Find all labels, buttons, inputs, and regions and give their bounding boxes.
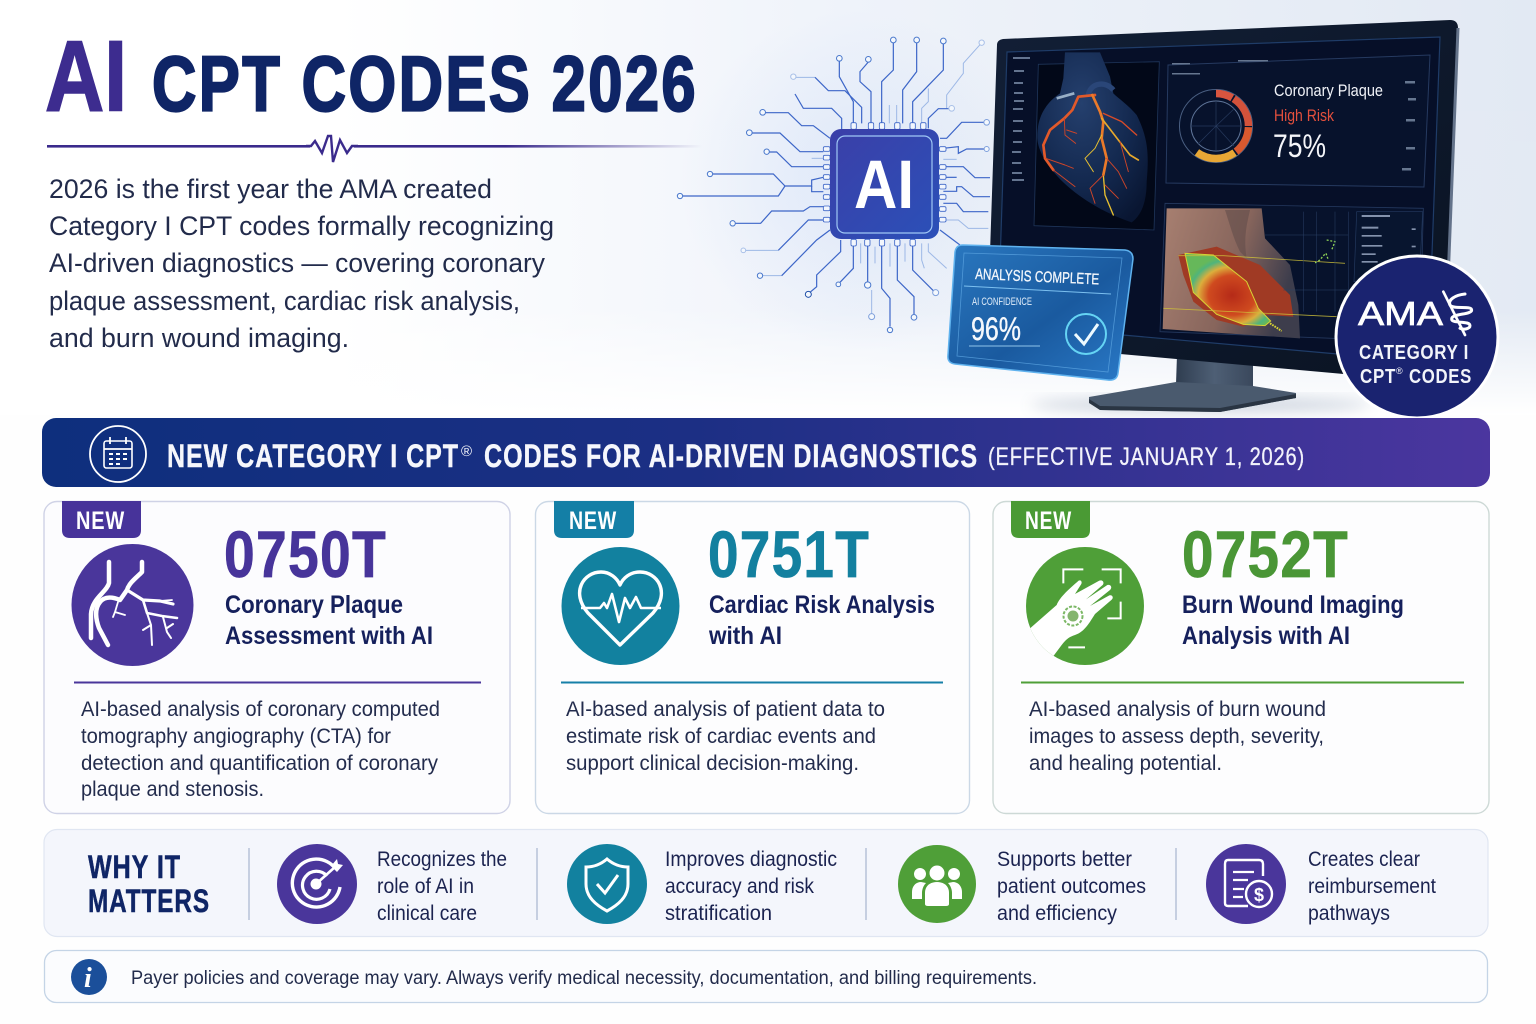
badge: AMA Category I CPT codes (1334, 254, 1500, 420)
panel: card 0751T: AI-based analysis of patient data to (566, 697, 885, 721)
banner (42, 418, 1490, 487)
icon: billing document: $ (1254, 885, 1264, 905)
icon: heart with pulse (562, 547, 680, 665)
tab: new (1011, 501, 1090, 538)
icon: info: i (84, 963, 92, 994)
text: recognizes (377, 848, 507, 925)
panel: card 0752T: AI-based analysis of burn wound (1029, 697, 1326, 721)
panel: card 0750T: detection and quantification of coronary (81, 751, 438, 775)
text: creates (1308, 848, 1436, 925)
text: supports (997, 848, 1146, 925)
tab: new: NEW (76, 507, 125, 535)
text: creates: Creates clear (1308, 848, 1420, 871)
intro paragraph: 2026 is the first year the AMA created (49, 174, 492, 204)
panel: card 0752T: images to assess depth, severity, (1029, 724, 1324, 748)
tab: new (554, 501, 634, 538)
icon: coronary arteries (72, 544, 194, 666)
floating card: analysis complete (948, 245, 1133, 380)
intro paragraph: Category I CPT codes formally recognizing (49, 211, 554, 241)
title: AI (45, 20, 127, 132)
plaque risk panel: Coronary Plaque (1274, 82, 1383, 100)
plaque risk panel: High Risk (1274, 107, 1335, 125)
text: recognizes: clinical care (377, 902, 477, 925)
panel: card 0752T: Analysis with AI (1182, 622, 1350, 650)
stand (1089, 355, 1296, 412)
illustration: AI chip with circuit traces (677, 10, 1040, 350)
icon: target (277, 844, 357, 924)
heading: why it matters (88, 849, 210, 919)
panel: card 0750T: AI-based analysis of coronary computed (81, 697, 440, 721)
panel: card 0750T: 0750T (224, 517, 387, 591)
intro paragraph: plaque assessment, cardiac risk analysis, (49, 286, 520, 316)
intro paragraph: AI-driven diagnostics — covering coronary (49, 248, 545, 278)
title rule with heartbeat (47, 136, 702, 162)
panel: card 0751T: support clinical decision-making. (566, 751, 859, 775)
banner: (EFFECTIVE JANUARY 1, 2026) (988, 443, 1305, 471)
badge: AMA Category I CPT codes: CODES (1409, 366, 1472, 388)
tab: new (62, 501, 141, 538)
heading: why it matters: WHY IT (88, 849, 181, 885)
title: CPT CODES 2026 (152, 40, 698, 128)
text: improves (665, 848, 837, 925)
text: improves: accuracy and risk (665, 875, 814, 898)
text: supports: patient outcomes (997, 875, 1146, 898)
title (45, 20, 698, 132)
banner: ® (461, 443, 472, 460)
banner: CODES FOR AI-DRIVEN DIAGNOSTICS (484, 438, 978, 474)
panel: card 0751T: Cardiac Risk Analysis (709, 591, 935, 619)
intro paragraph (49, 174, 554, 353)
icon: rod of asclepius (1443, 292, 1472, 335)
panel: card 0752T: Burn Wound Imaging (1182, 591, 1404, 619)
panel: card 0751T (536, 501, 970, 814)
panel: card 0751T: estimate risk of cardiac events and (566, 724, 876, 748)
burn imaging panel (1160, 203, 1423, 342)
heading: why it matters: MATTERS (88, 883, 210, 919)
icon: shield (567, 844, 647, 924)
text: creates: reimbursement (1308, 875, 1436, 898)
panel: card 0751T: with AI (708, 622, 782, 650)
plaque risk panel: 75% (1273, 128, 1326, 164)
icon: info (71, 959, 107, 995)
plaque risk panel (1166, 55, 1430, 187)
tab: new: NEW (569, 507, 617, 535)
text: supports: and efficiency (997, 902, 1117, 925)
panel: card 0752T: and healing potential. (1029, 751, 1222, 775)
badge: AMA Category I CPT codes: AMA (1358, 295, 1443, 332)
badge: AMA Category I CPT codes: CPT (1360, 366, 1396, 388)
text: improves: Improves diagnostic (665, 848, 837, 871)
text: recognizes: Recognizes the (377, 848, 507, 871)
intro paragraph: and burn wound imaging. (49, 323, 349, 353)
badge: AMA Category I CPT codes: ® (1396, 366, 1403, 376)
text: creates: pathways (1308, 902, 1390, 925)
panel: card 0750T (44, 501, 510, 814)
icon: people (898, 845, 976, 923)
panel: disclaimer note (44, 950, 1488, 1002)
icon: hand scan (1026, 547, 1144, 665)
tab: new: NEW (1025, 507, 1072, 535)
icon: billing document (1206, 844, 1286, 924)
panel: card 0752T (993, 501, 1489, 814)
illustration: monitor (987, 20, 1458, 413)
text: supports: Supports better (997, 848, 1132, 871)
floating card: analysis complete: ANALYSIS COMPLETE (975, 266, 1099, 288)
panel: disclaimer note: Payer policies and coverage may vary. Always verify medical necessity, documentation, and billing requirements. (131, 968, 1037, 989)
text: recognizes: role of AI in (377, 875, 474, 898)
floating card: analysis complete: 96% (971, 311, 1021, 347)
panel: card 0750T: tomography angiography (CTA) for (81, 724, 391, 748)
panel: card 0750T: Coronary Plaque (225, 591, 403, 619)
panel: card 0750T: Assessment with AI (225, 622, 433, 650)
panel: card 0752T: 0752T (1182, 517, 1349, 591)
panel: why it matters (44, 830, 1488, 936)
illustration: AI chip with circuit traces: AI (854, 146, 914, 223)
heart panel (1034, 52, 1159, 230)
banner: NEW CATEGORY I CPT (167, 438, 459, 474)
monitor sidebar details (1012, 57, 1030, 181)
panel: card 0751T: 0751T (708, 517, 870, 591)
text: improves: stratification (665, 902, 772, 925)
icon: calendar (90, 426, 146, 482)
floating card: analysis complete: AI CONFIDENCE (972, 296, 1032, 308)
badge: AMA Category I CPT codes: CATEGORY I (1359, 342, 1469, 364)
panel: card 0750T: plaque and stenosis. (81, 777, 264, 801)
